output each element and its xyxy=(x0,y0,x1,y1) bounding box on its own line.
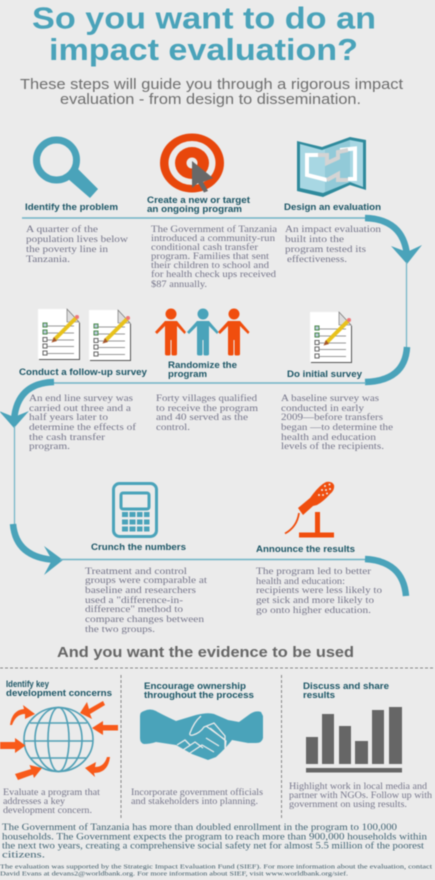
text: encourage ownership: Incorporate government officials xyxy=(131,787,263,798)
heading: step 1: Identify the problem xyxy=(25,202,118,212)
text: program scale-up summary: The Government of Tanzania has more than doubled enrollment in the program to 100,000 xyxy=(2,822,397,833)
text: step 1: Tanzania. xyxy=(26,254,70,265)
text: program scale-up summary: citizens. xyxy=(2,850,45,860)
text: step 2: program. Families that sent xyxy=(151,251,269,262)
text: identify key development concerns xyxy=(3,787,100,816)
heading: step 2 xyxy=(147,195,250,214)
heading: discuss and share results: Discuss and share xyxy=(303,681,389,691)
footer credit: David Evans at devans2@worldbank.org. For more information about SIEF, visit www.worldbank.org/sief. xyxy=(0,871,348,878)
text: step 2: introduced a community-run xyxy=(151,233,275,244)
text: step 3: built into the xyxy=(285,234,344,245)
heading: step 2: an ongoing program xyxy=(147,204,242,214)
text: step 1 xyxy=(26,224,128,265)
text: follow-up survey xyxy=(29,393,137,452)
text: discuss and share results: Highlight work in local media and xyxy=(289,781,427,792)
text: initial survey: A baseline survey was xyxy=(281,393,379,404)
text: step 2 xyxy=(151,224,278,290)
icon: calculator xyxy=(114,484,156,536)
heading: initial survey: Do initial survey xyxy=(287,369,362,379)
text: crunch the numbers xyxy=(85,566,207,635)
text: initial survey: levels of the recipients. xyxy=(281,441,384,452)
text: step 2: conditional cash transfer xyxy=(151,242,259,253)
text: step 2: their children to school and xyxy=(151,260,269,271)
text: announce the results: go onto higher education. xyxy=(256,605,371,616)
text: randomize: control. xyxy=(156,422,190,433)
text: follow-up survey: program. xyxy=(29,441,70,452)
text: announce the results: health and education: xyxy=(256,576,345,587)
text: identify key development concerns: addresses a key xyxy=(3,796,65,807)
text: crunch the numbers: groups were comparable at xyxy=(85,575,207,586)
text: randomize: Forty villages qualified xyxy=(156,393,257,404)
text: crunch the numbers: used a "difference-in- xyxy=(85,595,183,606)
footer credit xyxy=(0,864,432,878)
heading: randomize: Randomize the xyxy=(168,360,237,370)
text: encourage ownership: and stakeholders into planning. xyxy=(131,796,258,807)
text: initial survey: health and education xyxy=(281,432,376,443)
heading: identify key development concerns xyxy=(6,679,112,698)
icon: globe with arrows xyxy=(0,701,118,780)
heading: discuss and share results xyxy=(303,681,389,700)
text: follow-up survey: determine the effects of xyxy=(29,422,137,433)
heading: announce the results: Announce the results xyxy=(256,544,355,554)
flow line: row 3 with arrow right xyxy=(13,524,406,596)
title: So you want to do an xyxy=(32,0,376,36)
icon: initial survey checklist xyxy=(310,312,352,363)
heading: and you want the evidence to be used: And you want the evidence to be used xyxy=(57,644,354,661)
text: initial survey: conducted in early xyxy=(281,403,364,414)
text: step 3: An impact evaluation xyxy=(285,224,381,235)
heading: randomize: program xyxy=(168,369,207,379)
title: impact evaluation? xyxy=(49,32,358,67)
heading: encourage ownership: throughout the process xyxy=(144,690,254,700)
text: announce the results: The program led to better xyxy=(256,566,372,577)
text: announce the results xyxy=(256,566,382,616)
icon: target with cursor xyxy=(160,134,224,192)
text: discuss and share results xyxy=(289,781,432,810)
text: program scale-up summary xyxy=(2,822,427,860)
heading: identify key development concerns: Identify key xyxy=(6,679,49,689)
text: step 3 xyxy=(285,224,381,265)
icon: folded map xyxy=(297,137,366,197)
heading: step 2: Create a new or target xyxy=(147,195,250,205)
icon: magnifying glass xyxy=(36,140,98,198)
icon: follow-up survey checklist 1 xyxy=(38,309,80,360)
icon: three people holding hands xyxy=(155,308,250,356)
text: step 3: effectiveness. xyxy=(287,254,347,265)
heading: randomize xyxy=(168,360,237,379)
text: identify key development concerns: Evaluate a program that xyxy=(3,787,100,798)
text: crunch the numbers: compare changes between xyxy=(85,614,204,625)
title xyxy=(32,0,376,67)
text: program scale-up summary: households. The Government expects the program to reach more than 900,000 households within xyxy=(2,832,427,842)
text: step 3: program tested its xyxy=(285,244,366,255)
heading: encourage ownership xyxy=(144,681,254,700)
text: initial survey: 2009—before transfers xyxy=(281,412,383,423)
text: initial survey xyxy=(281,393,393,452)
text: step 1: population lives below xyxy=(26,234,128,245)
text: program scale-up summary: the next two years, creating a comprehensive social safety net for almost 5.5 million of the poorest xyxy=(2,840,424,852)
text: announce the results: get sick and more likely to xyxy=(256,595,374,606)
text: randomize: to receive the program xyxy=(156,403,259,414)
text: discuss and share results: partner with NGOs. Follow up with xyxy=(289,790,432,801)
text: encourage ownership xyxy=(131,787,263,807)
heading: discuss and share results: results xyxy=(303,690,335,700)
text: randomize xyxy=(156,393,259,433)
text: identify key development concerns: development concern. xyxy=(3,805,92,816)
text: step 1: the poverty line in xyxy=(26,244,108,255)
text: step 2: for health check ups received xyxy=(151,269,276,280)
icon: handshake xyxy=(140,710,263,760)
heading: step 3: Design an evaluation xyxy=(284,202,381,212)
icon: follow-up survey checklist 2 xyxy=(89,310,131,361)
flow line: row 1 with arrow down xyxy=(22,218,422,348)
text: follow-up survey: half years later to xyxy=(29,412,108,423)
chart: bar chart icon xyxy=(306,707,402,772)
flow line: row 2 with arrow down xyxy=(0,347,407,525)
subtitle xyxy=(20,77,403,108)
text: crunch the numbers: Treatment and control xyxy=(85,566,187,577)
heading: identify key development concerns: development concerns xyxy=(6,688,112,698)
text: discuss and share results: government on using results. xyxy=(289,799,407,810)
text: step 1: A quarter of the xyxy=(26,224,98,235)
subtitle: These steps will guide you through a rigorous impact xyxy=(20,77,403,93)
text: crunch the numbers: baseline and researchers xyxy=(85,585,196,596)
subtitle: evaluation - from design to dissemination. xyxy=(60,92,361,108)
icon: microphone xyxy=(285,482,334,538)
text: follow-up survey: carried out three and a xyxy=(29,403,132,414)
text: step 2: $87 annually. xyxy=(151,279,207,290)
footer credit: The evaluation was supported by the Strategic Impact Evaluation Fund (SIEF). For more information about the evaluation, contact xyxy=(0,864,432,870)
text: follow-up survey: An end line survey was xyxy=(29,393,133,404)
text: crunch the numbers: the two groups. xyxy=(85,624,155,635)
heading: follow-up survey: Conduct a follow-up survey xyxy=(19,367,147,377)
text: randomize: and 40 served as the xyxy=(156,412,248,423)
heading: crunch the numbers: Crunch the numbers xyxy=(91,542,186,552)
text: follow-up survey: the cash transfer xyxy=(29,432,106,443)
text: crunch the numbers: difference" method to xyxy=(85,604,183,615)
text: initial survey: began —to determine the xyxy=(281,422,393,433)
text: step 2: The Government of Tanzania xyxy=(151,224,278,235)
heading: encourage ownership: Encourage ownership xyxy=(144,681,247,691)
text: announce the results: recipients were less likely to xyxy=(256,585,382,596)
